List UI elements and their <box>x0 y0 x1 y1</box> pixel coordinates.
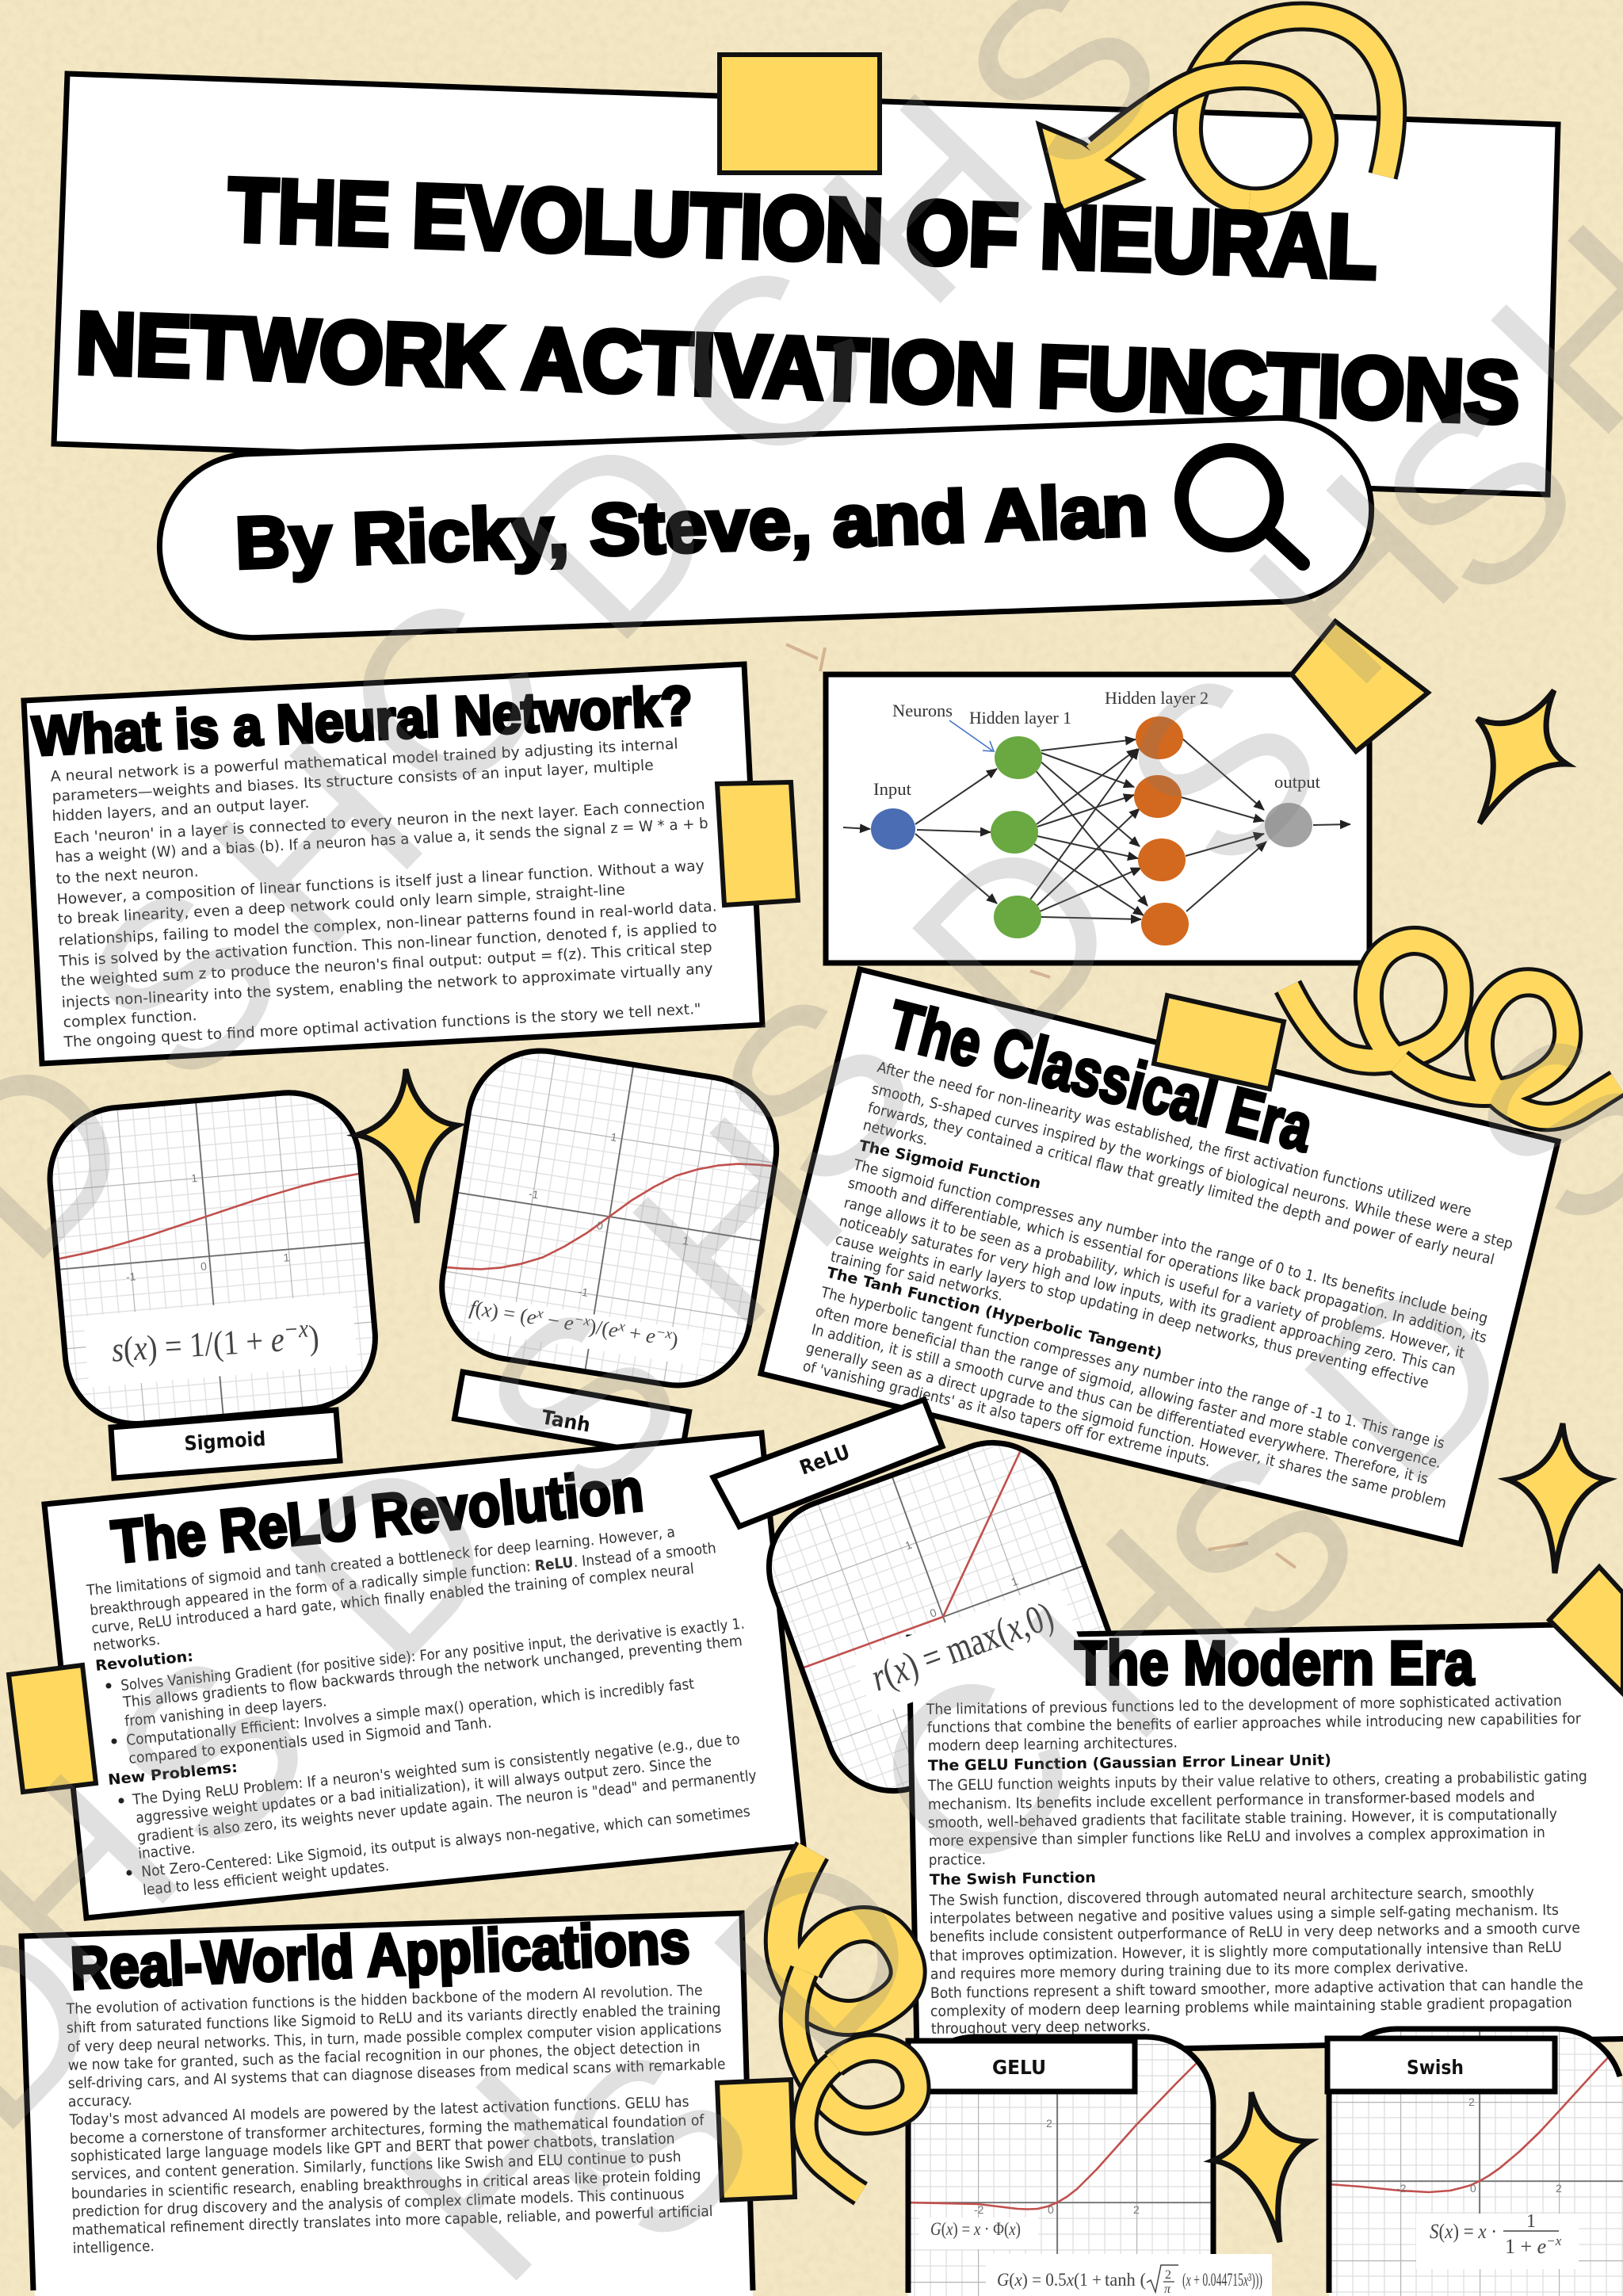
watermark: S <box>1071 619 1373 919</box>
heading: The ReLU Revolution <box>109 1456 646 1576</box>
body text: compared to exponentials used in Sigmoid and Tanh. <box>128 1714 492 1767</box>
relu plot area: -1 <box>869 1646 882 1662</box>
label: tanh: Tanh <box>540 1405 592 1437</box>
body text: accuracy. <box>68 2092 132 2111</box>
gelu formula full <box>986 2254 1272 2296</box>
watermark: D <box>1254 1224 1564 1533</box>
blue neuron pointer <box>949 720 994 751</box>
tanh formula: x <box>535 1305 544 1321</box>
label: relu <box>713 1400 942 1526</box>
body text: cause weights in early layers to stop updating in deep networks, thus preventing effective <box>834 1231 1430 1392</box>
layer labels: Neurons <box>892 701 953 720</box>
body text: sophisticated large language models like GPT and BERT that power chatbots, translation <box>71 2130 675 2165</box>
body text: services, and content generation. Similarly, functions like Swish and ELU continue to push <box>71 2149 682 2183</box>
chart: swish graph <box>1329 2029 1623 2296</box>
panel background <box>909 1623 1623 2054</box>
body text: The Swish function, discovered through automated neural architecture search, smoothly <box>929 1884 1534 1909</box>
body text: The limitations of previous functions led to the development of more sophisticated activation <box>926 1693 1562 1718</box>
gelu formula full: tanh ( <box>1105 2270 1146 2290</box>
panel background <box>21 1913 753 2296</box>
body text: boundaries in scientific research, enabling breakthroughs in critical areas like protein folding <box>71 2167 701 2202</box>
gelu formula full: G(x) = 0.5x(1 + <box>997 2270 1102 2290</box>
tanh formula: f(x) = (e <box>468 1296 538 1329</box>
label: sigmoid <box>111 1410 340 1478</box>
tanh plot area: 1 <box>682 1234 690 1247</box>
heading: What is a Neural Network? <box>31 674 694 767</box>
icon: star right <box>1508 1423 1607 1573</box>
layer labels: Input <box>873 779 911 799</box>
tanh plot area: -1 <box>578 1285 590 1299</box>
body text: from vanishing in deep layers. <box>124 1694 327 1730</box>
body text <box>66 1982 726 2257</box>
watermark: S <box>666 940 967 1240</box>
body text: practice. <box>929 1851 986 1869</box>
body text: The evolution of activation functions is the hidden backbone of the modern AI revolution. The <box>66 1982 703 2018</box>
tanh outline <box>431 1041 787 1396</box>
body text: complexity of modern deep learning problems while maintaining stable gradient propagation <box>930 1995 1572 2020</box>
watermark: C <box>288 543 599 852</box>
body text: lead to less efficient weight updates. <box>142 1858 390 1899</box>
body text <box>85 1524 758 1899</box>
body text: noticeably saturates for very high and low inputs, with its gradient approaching zero. This can <box>838 1213 1457 1379</box>
icon: magnifying glass <box>1182 450 1303 563</box>
tanh formula: e <box>607 1318 620 1342</box>
body text: training for said networks. <box>829 1248 1005 1305</box>
gelu formula full: π <box>1164 2283 1171 2296</box>
watermark: C <box>819 1618 1129 1927</box>
body text: The sigmoid function compresses any number into the range of 0 to 1. Its benefits include being <box>851 1156 1489 1328</box>
watermark: S <box>432 1253 733 1553</box>
body text: functions that combine the benefits of earlier approaches while introducing new capabilities for <box>927 1710 1581 1736</box>
label: tanh <box>455 1372 689 1458</box>
tape: applications panel <box>717 2080 795 2200</box>
chart: neural network diagram <box>826 674 1369 963</box>
heading: main title: NETWORK ACTIVATION FUNCTIONS <box>74 294 1521 442</box>
body text: modern deep learning architectures. <box>928 1735 1178 1755</box>
watermark: H <box>772 44 1083 353</box>
body text: A neural network is a powerful mathematical model trained by adjusting its internal <box>50 736 678 785</box>
watermark: D <box>459 380 769 689</box>
tanh formula: e <box>644 1324 657 1348</box>
tanh formula: −x <box>655 1324 674 1342</box>
body text: that improves optimization. However, it is slightly more computationally intensive than ReLU <box>930 1939 1562 1965</box>
body text: Solves Vanishing Gradient (for positive side): For any positive input, the derivative is exactly 1. <box>120 1616 746 1694</box>
swish formula: S(x) = x · <box>1430 2220 1497 2243</box>
body text: Both functions represent a shift toward smoother, more adaptive activation that can handle the <box>930 1976 1583 2002</box>
body text: to the next neuron. <box>55 864 199 888</box>
body text: This is solved by the activation function. This non-linear function, denoted f, is applied to <box>58 919 717 970</box>
sigmoid plot area: -1 <box>125 1270 136 1283</box>
watermark: S <box>1109 1396 1411 1695</box>
body text: curve, ReLU introduced a hard gate, which finally enabled the training of complex neural <box>90 1561 695 1637</box>
watermark: H <box>1198 424 1509 733</box>
body text: generally seen as a direct upgrade to the sigmoid function. However, it shares the same problem <box>804 1339 1448 1512</box>
heading: Real-World Applications <box>69 1908 691 2003</box>
body text: of 'vanishing gradients' as it also tapers off for extreme inputs. <box>801 1358 1212 1470</box>
body text: inactive. <box>137 1840 196 1862</box>
watermark: D <box>239 1403 549 1712</box>
relu plot area <box>772 1446 1106 1788</box>
layer labels: Hidden layer 2 <box>1105 688 1209 708</box>
label: gelu <box>908 2041 1135 2092</box>
layer labels: Hidden layer 1 <box>969 708 1071 728</box>
tape: relu panel <box>9 1665 96 1792</box>
tanh formula: − <box>540 1308 567 1334</box>
watermark: C <box>613 210 924 519</box>
body text: smooth, S-shaped curves inspired by the workings of biological neurons. While these were a step <box>870 1080 1514 1253</box>
diagram frame <box>826 674 1369 963</box>
watermark: D <box>663 1797 974 2106</box>
body text: The ongoing quest to find more optimal activation functions is the story we tell next." <box>63 1001 701 1051</box>
tanh formula: e <box>563 1311 575 1335</box>
tape: title square <box>720 55 880 173</box>
body text: The hyperbolic tangent function compresses any number into the range of -1 to 1. This range is <box>819 1284 1446 1452</box>
subtitle: authors: By Ricky, Steve, and Alan <box>234 470 1149 584</box>
body text: However, a composition of linear functions is itself just a linear function. Without a way <box>56 858 705 908</box>
body text: the weighted sum z to produce the neuron's final output: output = f(z). This critical step <box>60 939 712 990</box>
swish formula: 1 <box>1526 2211 1536 2232</box>
icon: curly ribbon upper right <box>1288 941 1617 1117</box>
tanh plot area <box>445 1054 773 1382</box>
body text: more expensive than simpler functions like ReLU and involves a complex approximation in <box>929 1824 1545 1850</box>
layer labels: output <box>1274 772 1320 792</box>
body text: Not Zero-Centered: Like Sigmoid, its output is always non-negative, which can sometimes <box>140 1803 751 1881</box>
list bullets <box>106 1683 132 1875</box>
tanh formula: ) <box>670 1328 680 1351</box>
body text: and requires more memory during training due to its more complex derivative. <box>930 1959 1468 1983</box>
body text: In addition, it is still a smooth curve and thus can be differentiated everywhere. Therefore, it is <box>810 1321 1430 1488</box>
swish formula <box>1430 2211 1562 2258</box>
body text: aggressive weight updates or a bad initialization), it will always output zero. Since the <box>135 1753 712 1827</box>
gelu plot area: 0 <box>1048 2203 1054 2216</box>
body text: The GELU Function (Gaussian Error Linear Unit) <box>928 1752 1331 1775</box>
tanh plot area: 1 <box>610 1130 618 1144</box>
body text: Today's most advanced AI models are powered by the latest activation functions. GELU has <box>69 2094 689 2129</box>
body text: range allows it to be seen as a probability, which is useful for a variety of problems. However, it <box>842 1194 1466 1362</box>
body text: benefits include consistent outperformance of ReLU in very deep networks and a smooth curve <box>930 1920 1580 1946</box>
chart: sigmoid graph <box>37 1084 386 1436</box>
body text: prediction for drug discovery and the analysis of complex climate models. This continuous <box>72 2186 685 2221</box>
body text: complex function. <box>63 1007 197 1031</box>
gelu formula full: 2 <box>1165 2268 1171 2282</box>
panel background <box>24 664 762 1064</box>
gelu plot area: -2 <box>974 2203 984 2216</box>
body text <box>801 1059 1514 1512</box>
body text: forwards, they contained a critical flaw that greatly limited the depth and power of early neural <box>866 1099 1496 1268</box>
panel background <box>44 1433 804 1918</box>
gelu plot area: 2 <box>1133 2203 1140 2216</box>
body text: gradient is also zero, its weights never update again. The neuron is "dead" and permanently <box>136 1767 758 1846</box>
tape: right edge diamond <box>1549 1567 1623 1694</box>
body text: throughout very deep networks. <box>931 2018 1151 2038</box>
body text: self-driving cars, and AI systems that can diagnose diseases from medical scans with remarkable <box>68 2056 726 2092</box>
gelu formula short: G(x) = x · Φ(x) <box>930 2219 1021 2239</box>
icon: star between gelu and swish <box>1213 2092 1309 2242</box>
body text: The Swish Function <box>930 1870 1096 1889</box>
relu plot area: 1 <box>1010 1575 1020 1588</box>
tanh formula: −x <box>573 1311 591 1329</box>
body text: of very deep neural networks. This, in turn, made possible complex computer vision applications <box>67 2020 722 2056</box>
body text: The limitations of sigmoid and tanh created a bottleneck for deep learning. However, a <box>85 1524 676 1599</box>
watermark: D <box>861 782 1172 1091</box>
swish formula: −x <box>1546 2233 1562 2248</box>
watermark: H <box>582 1067 892 1376</box>
panel: main title <box>54 17 1558 495</box>
swish plot area: 2 <box>1468 2095 1475 2108</box>
sigmoid formula: s(x) = 1/(1 + e <box>110 1320 288 1370</box>
body text <box>926 1693 1587 2038</box>
tanh formula: )/( <box>588 1315 611 1340</box>
hidden layer 1 neurons <box>991 736 1042 938</box>
watermark: S <box>32 833 333 1133</box>
relu formula: r(x) = max(x,0) <box>865 1593 1059 1699</box>
label: relu: ReLU <box>796 1440 853 1480</box>
input neuron <box>871 808 915 850</box>
body text: networks. <box>92 1632 161 1655</box>
sigmoid outline <box>44 1087 381 1430</box>
body text: become a cornerstone of transformer architectures, forming the mathematical foundation of <box>70 2112 705 2148</box>
swish plot area: 0 <box>1470 2182 1476 2195</box>
tape: neural network panel <box>717 782 798 905</box>
body text: smooth, well-behaved gradients that facilitate stable training. However, it is computationally <box>928 1806 1557 1832</box>
body text: intelligence. <box>73 2238 155 2257</box>
body text: New Problems: <box>107 1759 239 1789</box>
body text: mechanism. Its benefits include excellent performance in transformer-based models and <box>928 1788 1535 1813</box>
gelu formula short <box>919 2218 1038 2249</box>
watermark: H <box>162 690 472 999</box>
body text: The Sigmoid Function <box>857 1137 1042 1193</box>
body text: networks. <box>861 1117 930 1149</box>
body text: often more beneficial than the range of sigmoid, allowing faster and more stable convergence. <box>814 1303 1443 1472</box>
panel border <box>21 1913 753 2290</box>
body text <box>50 736 717 1051</box>
output neuron <box>1265 803 1312 847</box>
heading: The Modern Era <box>1075 1628 1475 1698</box>
body text: parameters—weights and biases. Its structure consists of an input layer, multiple <box>52 757 654 805</box>
relu plot area: 0 <box>928 1606 938 1620</box>
body text: smooth and differentiable, which is essential for operations like back propagation. In addition, its <box>846 1175 1488 1347</box>
relu plot area: 1 <box>903 1538 914 1552</box>
body text: breakthrough appeared in the form of a radically simple function: ReLU. Instead of a smooth <box>89 1540 717 1619</box>
icon: star top right <box>1477 690 1567 823</box>
tanh plot area: -1 <box>528 1187 540 1201</box>
swish outline <box>1329 2029 1620 2293</box>
gelu formula full: (x + 0.044715x³))) <box>1182 2270 1262 2290</box>
sigmoid plot area: 1 <box>191 1171 198 1185</box>
watermark: S <box>504 1996 805 2295</box>
swish plot area <box>1329 2029 1623 2296</box>
tanh formula: x <box>617 1318 626 1335</box>
watermark: S <box>1327 348 1623 648</box>
body text: we now take for granted, such as the facial recognition in our phones, the object detection in <box>68 2038 701 2074</box>
hidden layer 2 neurons <box>1134 716 1189 946</box>
body text: mathematical refinement directly translates into more capable, reliable, and powerful artificial <box>72 2203 713 2239</box>
tape: diagram corner <box>1292 621 1428 751</box>
body text: Revolution: <box>94 1648 194 1675</box>
chart: relu graph <box>766 1439 1111 1794</box>
body text: Computationally Efficient: Involves a simple max() operation, which is incredibly fast <box>125 1676 695 1749</box>
body text: This allows gradients to flow backwards through the network unchanged, preventing them <box>121 1633 743 1711</box>
panel: what is a neural network <box>24 664 798 1064</box>
icon: swirl arrow <box>1039 17 1392 212</box>
body text: hidden layers, and an output layer. <box>52 795 310 825</box>
panel: authors pill <box>156 415 1375 641</box>
body text: has a weight (W) and a bias (b). If a neuron has a value a, it sends the signal z = W * a + b <box>55 816 708 866</box>
label: swish <box>1327 2038 1555 2092</box>
swish plot area: 2 <box>1556 2182 1562 2195</box>
tanh formula: + <box>623 1320 648 1347</box>
icon: curly ribbon center <box>783 1851 916 2194</box>
body text: After the need for non-linearity was established, the first activation functions utilized were <box>876 1059 1473 1220</box>
label: gelu: GELU <box>992 2056 1046 2079</box>
body text: to break linearity, even a deep network could only learn simple, straight-line <box>57 881 625 928</box>
body text: relationships, failing to model the complex, non-linear patterns found in real-world data. <box>58 898 717 949</box>
panel: the relu revolution <box>9 1433 804 1918</box>
label: sigmoid: Sigmoid <box>184 1427 266 1455</box>
tape: classical panel <box>1154 995 1284 1089</box>
panel background <box>761 969 1558 1544</box>
body text: injects non-linearity into the system, enabling the network to approximate virtually any <box>61 961 713 1011</box>
relu outline <box>750 1423 1136 1810</box>
heading: The Classical Era <box>881 986 1321 1166</box>
sigmoid formula: −x <box>283 1314 309 1343</box>
swish plot area: -2 <box>1396 2182 1407 2195</box>
swish formula: 1 + e <box>1505 2235 1546 2258</box>
sigmoid formula: ) <box>307 1318 320 1357</box>
body text: The Tanh Function (Hyperbolic Tangent) <box>825 1264 1163 1362</box>
sigmoid plot area: 1 <box>283 1251 290 1264</box>
body text: The Dying ReLU Problem: If a neuron's weighted sum is consistently negative (e.g., due to <box>131 1732 741 1809</box>
gelu plot area <box>907 2037 1213 2296</box>
chart: tanh graph <box>439 1048 780 1389</box>
chart: gelu graph <box>907 2037 1272 2296</box>
title panel background <box>54 74 1558 495</box>
panel: the classical era <box>761 969 1558 1544</box>
network connections <box>843 739 1350 919</box>
heading: main title <box>74 159 1521 442</box>
icon: star between sigmoid and tanh <box>357 1069 457 1223</box>
watermark: S <box>59 1602 361 1901</box>
pill background <box>156 415 1375 641</box>
layer labels <box>873 688 1320 799</box>
gelu plot area: 2 <box>1046 2117 1052 2130</box>
body text: Each 'neuron' in a layer is connected to every neuron in the next layer. Each connection <box>53 797 705 847</box>
sigmoid plot area <box>52 1095 372 1421</box>
panel: real-world applications <box>21 1908 753 2296</box>
tanh plot area: 0 <box>596 1219 604 1232</box>
heading: main title: THE EVOLUTION OF NEURAL <box>227 159 1379 297</box>
watermark: H <box>978 1478 1289 1787</box>
label: swish: Swish <box>1407 2056 1464 2079</box>
body text: The GELU function weights inputs by their value relative to others, creating a probabilistic gating <box>927 1768 1587 1794</box>
panel: the modern era <box>852 1582 1623 2054</box>
sigmoid plot area: 0 <box>200 1259 208 1273</box>
gelu outline <box>908 2037 1213 2293</box>
body text: shift from saturated functions like Sigmoid to ReLU and its variants directly enabled the training <box>67 2001 721 2037</box>
body text: interpolates between negative and positive values using a simple self-gating mechanism. Its <box>930 1902 1559 1927</box>
